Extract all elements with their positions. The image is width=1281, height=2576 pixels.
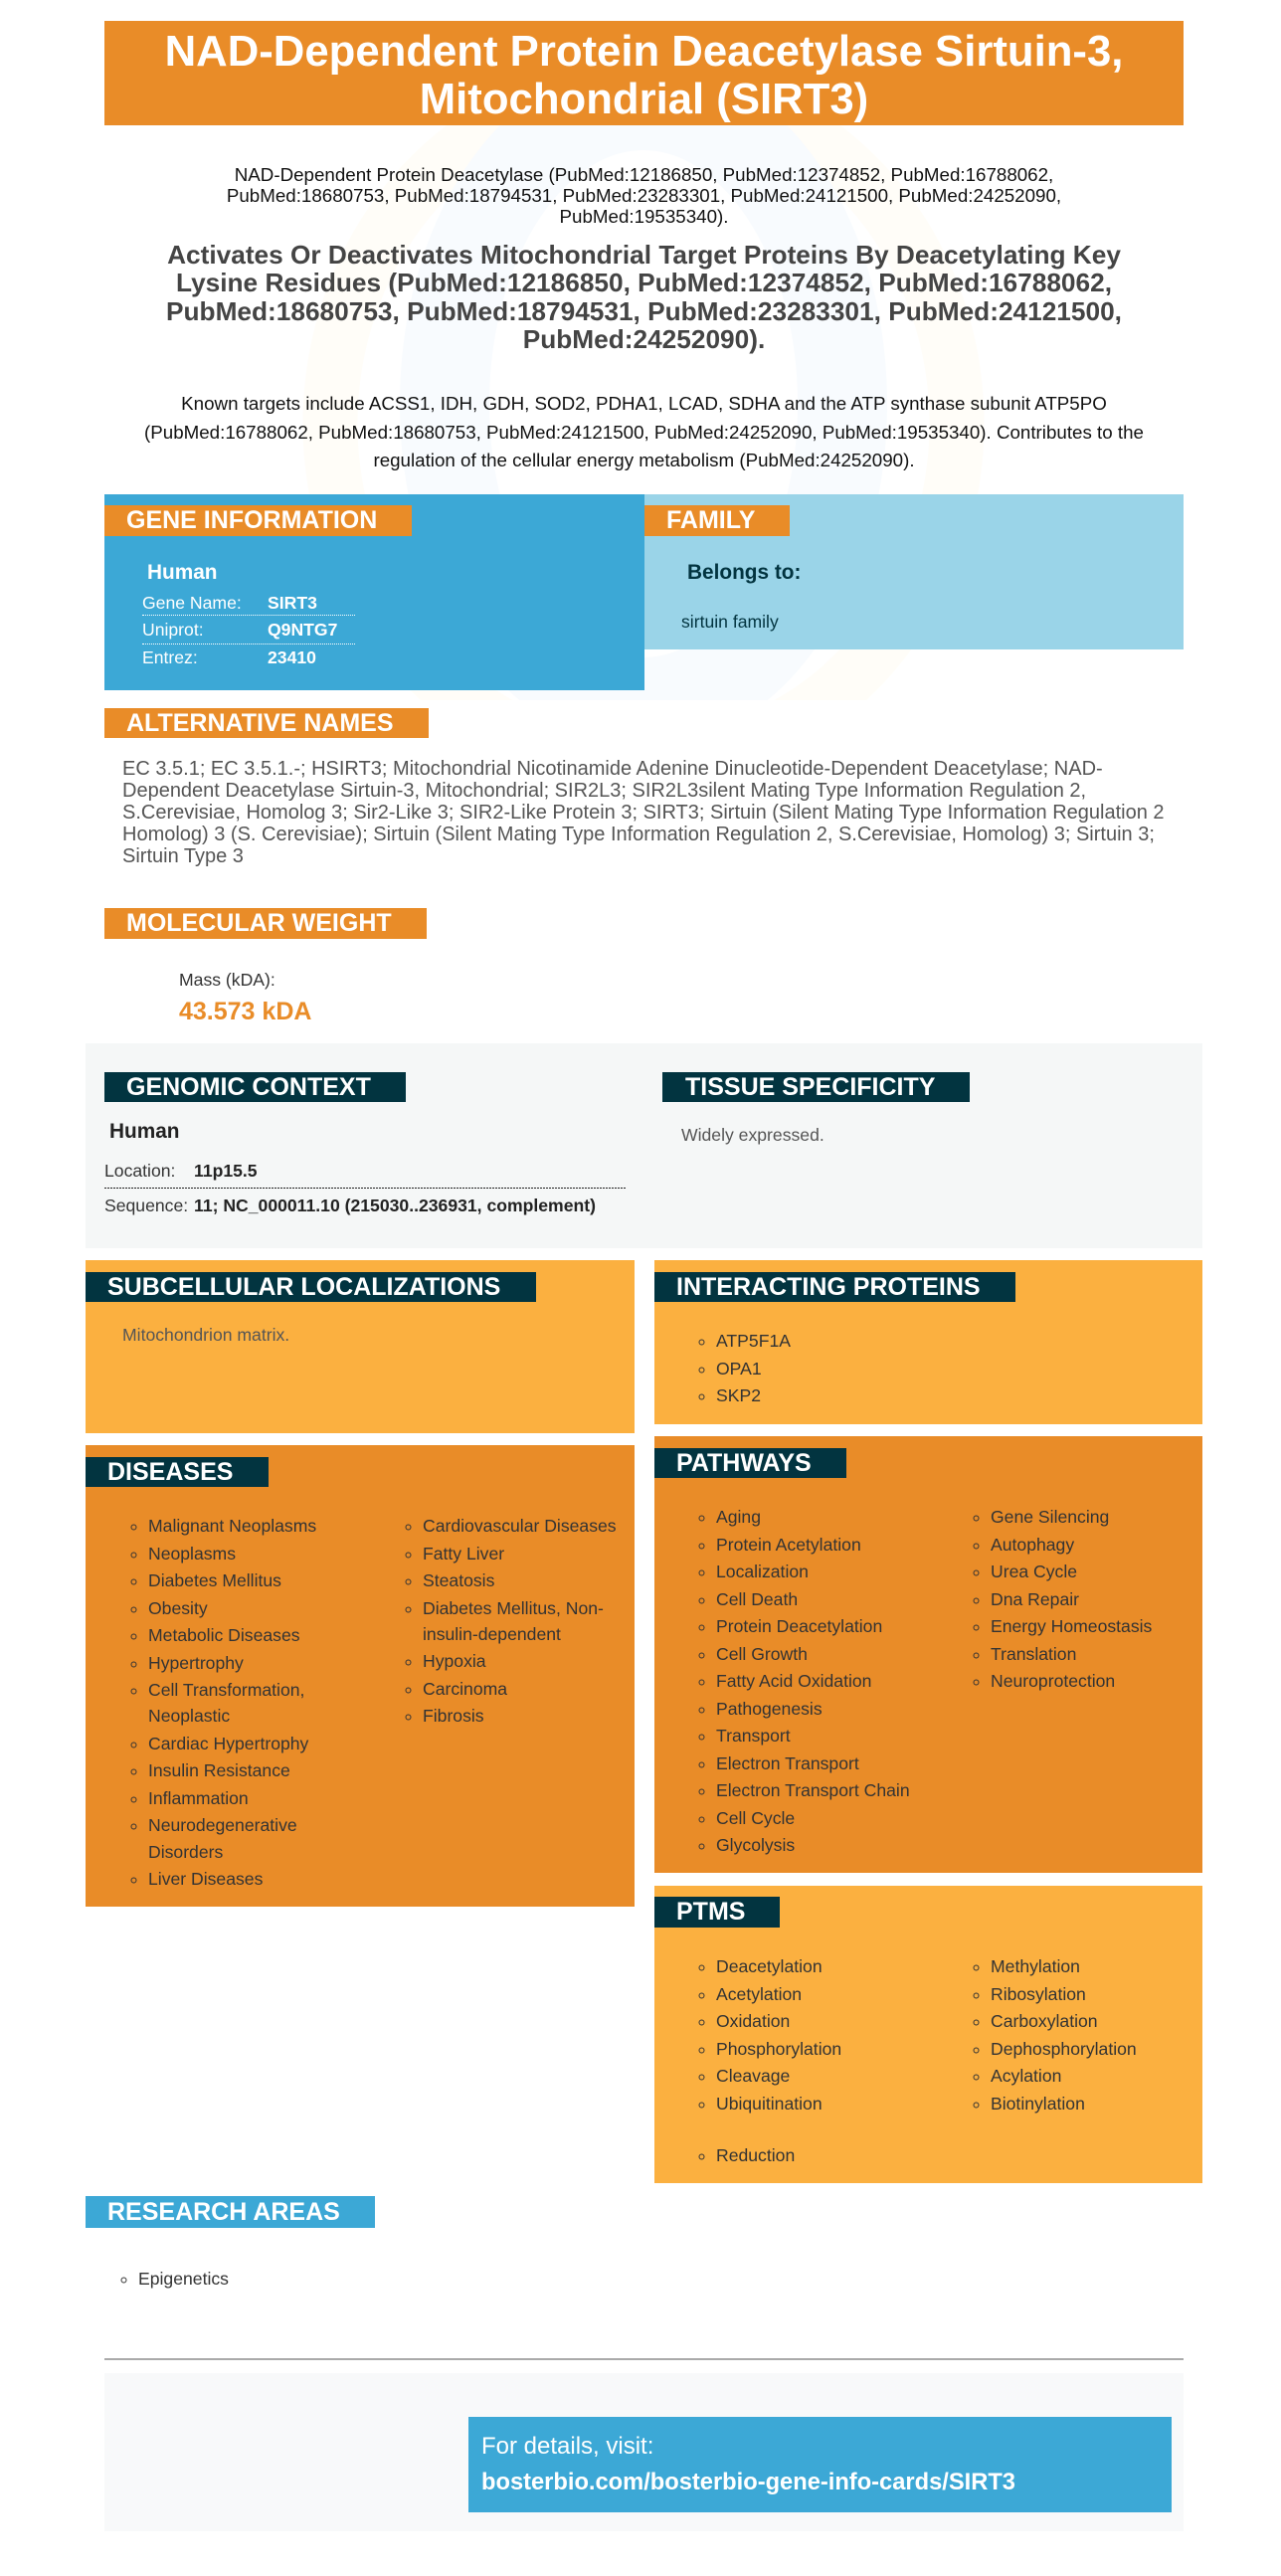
title <box>104 21 1184 125</box>
heading <box>654 1448 846 1478</box>
heading <box>654 1897 780 1928</box>
entrez row: 23410 <box>268 647 316 667</box>
protein list: OPA1 <box>716 1359 762 1379</box>
disease list column 2: Cardiovascular Diseases <box>423 1516 617 1536</box>
alternative names text <box>122 758 1165 867</box>
species label: Human <box>109 1120 179 1143</box>
ptm list column 1 <box>698 1956 841 2165</box>
panel: subcellular localizations <box>86 1260 635 1433</box>
pathway list column 1: Pathogenesis <box>716 1699 823 1719</box>
uniprot row: Uniprot: <box>142 620 204 640</box>
pathway list column 1 <box>698 1507 910 1855</box>
panel: family <box>644 494 1184 649</box>
sequence row <box>104 1196 596 1215</box>
call to action <box>468 2417 1172 2512</box>
pathway list column 2: Gene Silencing <box>991 1507 1109 1527</box>
function heading: PubMed:24252090). <box>523 324 765 354</box>
heading: alternative names: ALTERNATIVE NAMES <box>126 709 394 737</box>
pathway list column 2: Energy Homeostasis <box>991 1616 1152 1636</box>
disease list column 2: Carcinoma <box>423 1679 507 1699</box>
panel: genomic context and tissue specificity: 11; NC_000011.10 (215030..236931, complement) <box>194 1196 596 1215</box>
ptm list column 1: Deacetylation <box>716 1956 823 1976</box>
pathway list column 1: Aging <box>716 1507 761 1527</box>
entrez row <box>142 647 316 667</box>
location row: Location: <box>104 1161 175 1181</box>
mass value: 43.573 kDA <box>179 998 311 1025</box>
heading: PTMS <box>676 1898 745 1926</box>
intro paragraph: NAD-Dependent Protein Deacetylase (PubMed:12186850, PubMed:12374852, PubMed:16788062, <box>235 164 1053 185</box>
ptm list column 1: Phosphorylation <box>716 2039 841 2059</box>
alternative names text: Sirtuin Type 3 <box>122 845 244 867</box>
targets paragraph <box>144 393 1144 470</box>
pathway list column 1: Transport <box>716 1726 791 1746</box>
panel: gene information <box>104 494 644 690</box>
disease list column 2: Fatty Liver <box>423 1544 504 1564</box>
ptm list column 1: Oxidation <box>716 2011 790 2031</box>
species label: Human <box>147 561 217 584</box>
heading: molecular weight: MOLECULAR WEIGHT <box>126 909 392 937</box>
function heading <box>166 240 1122 354</box>
disease list column 2: Diabetes Mellitus, Non- <box>423 1597 604 1617</box>
disease list column 2: Steatosis <box>423 1570 494 1590</box>
title: NAD-Dependent Protein Deacetylase Sirtuin-3, <box>165 27 1123 76</box>
protein list: ATP5F1A <box>716 1331 791 1351</box>
disease list column 1: Insulin Resistance <box>148 1760 290 1780</box>
pathway list column 1: Fatty Acid Oxidation <box>716 1671 871 1691</box>
disease list column 2: insulin-dependent <box>423 1624 561 1644</box>
alternative names text: Dependent Deacetylase Sirtuin-3, Mitochondrial; SIR2L3; SIR2L3silent Mating Type Information Regulation 2, <box>122 780 1086 802</box>
ptm list column 1: Acetylation <box>716 1983 802 2003</box>
pathway list column 1: Cell Growth <box>716 1643 808 1663</box>
heading: family <box>644 505 790 536</box>
ptm list column 1: Reduction <box>716 2145 795 2165</box>
gene name row <box>142 590 355 616</box>
entrez row: Entrez: <box>142 647 198 667</box>
location row: 11p15.5 <box>194 1161 258 1181</box>
belongs to label: Belongs to: <box>687 561 801 584</box>
heading: PATHWAYS <box>676 1449 812 1477</box>
ptm list column 2: Acylation <box>991 2066 1061 2086</box>
disease list column 1 <box>131 1516 316 1889</box>
pathway list column 2: Translation <box>991 1643 1076 1663</box>
protein list <box>698 1331 791 1405</box>
pathway list column 1: Electron Transport Chain <box>716 1780 910 1800</box>
tissue specificity text: Widely expressed. <box>681 1125 824 1145</box>
background watermark logo <box>298 125 995 700</box>
heading: tissue specificity: TISSUE SPECIFICITY <box>685 1073 935 1101</box>
footer rule <box>104 2358 1184 2360</box>
targets paragraph: Known targets include ACSS1, IDH, GDH, SOD2, PDHA1, LCAD, SDHA and the ATP synthase subunit ATP5PO <box>181 393 1107 414</box>
pathway list column 1: Cell Cycle <box>716 1808 795 1828</box>
disease list column 2: Hypoxia <box>423 1651 486 1671</box>
ptm list column 2: Dephosphorylation <box>991 2039 1137 2059</box>
pathway list column 2: Urea Cycle <box>991 1562 1077 1581</box>
gene name row: SIRT3 <box>268 593 317 613</box>
disease list column 1: Cell Transformation, <box>148 1680 304 1700</box>
title: Mitochondrial (SIRT3) <box>420 75 868 123</box>
intro paragraph: PubMed:19535340). <box>560 206 728 227</box>
localization text: Mitochondrion matrix. <box>122 1325 289 1345</box>
panel: interacting proteins <box>654 1260 1202 1424</box>
panel: ptms <box>654 1886 1202 2183</box>
disease list column 1: Metabolic Diseases <box>148 1625 300 1645</box>
ptm list column 1: Cleavage <box>716 2066 790 2086</box>
heading: gene information: GENE INFORMATION <box>126 506 377 534</box>
uniprot row <box>142 617 355 644</box>
heading: SUBCELLULAR LOCALIZATIONS <box>107 1273 500 1301</box>
panel: pathways <box>654 1436 1202 1873</box>
disease list column 1: Inflammation <box>148 1788 249 1808</box>
alternative names text: S.Cerevisiae, Homolog 3; Sir2-Like 3; SIR2-Like Protein 3; SIRT3; Sirtuin (Silent Mating Type Information Regulation 2 <box>122 802 1165 824</box>
panel: diseases <box>86 1445 635 1907</box>
heading: research areas: RESEARCH AREAS <box>107 2198 340 2226</box>
heading: DISEASES <box>107 1458 233 1486</box>
alternative names text: Homolog) 3 (S. Cerevisiae); Sirtuin (Silent Mating Type Information Regulation 2, S.Cerevisiae, Homolog) 3; Sirtuin 3; <box>122 824 1155 845</box>
mass label: Mass (kDA): <box>179 970 275 990</box>
sequence row: Sequence: <box>104 1196 188 1215</box>
ptm list column 1: Ubiquitination <box>716 2093 823 2113</box>
research areas list: Epigenetics <box>138 2269 229 2289</box>
intro paragraph: PubMed:18680753, PubMed:18794531, PubMed:23283301, PubMed:24121500, PubMed:24252090, <box>227 185 1061 206</box>
ptm list column 2: Biotinylation <box>991 2093 1085 2113</box>
disease list column 1: Malignant Neoplasms <box>148 1516 316 1536</box>
panel: footer <box>104 2373 1184 2531</box>
function heading: PubMed:18680753, PubMed:18794531, PubMed:23283301, PubMed:24121500, <box>166 296 1122 326</box>
pathway list column 2 <box>973 1507 1152 1691</box>
disease list column 1: Disorders <box>148 1842 223 1862</box>
ptm list column 2: Carboxylation <box>991 2011 1098 2031</box>
pathway list column 1: Electron Transport <box>716 1752 859 1772</box>
ptm list column 2 <box>973 1956 1137 2113</box>
heading: INTERACTING PROTEINS <box>676 1273 981 1301</box>
pathway list column 2: Neuroprotection <box>991 1671 1115 1691</box>
gene name row: Gene Name: <box>142 593 242 613</box>
disease list column 2: Fibrosis <box>423 1706 484 1726</box>
pathway list column 1: Protein Deacetylation <box>716 1616 882 1636</box>
heading <box>86 1457 269 1487</box>
targets paragraph: regulation of the cellular energy metabolism (PubMed:24252090). <box>373 450 915 470</box>
pathway list column 1: Protein Acetylation <box>716 1534 861 1554</box>
pathway list column 1: Cell Death <box>716 1589 798 1609</box>
disease list column 1: Obesity <box>148 1597 208 1617</box>
disease list column 1: Cardiac Hypertrophy <box>148 1734 308 1753</box>
targets paragraph: (PubMed:16788062, PubMed:18680753, PubMed:24121500, PubMed:24252090, PubMed:19535340). Contributes to the <box>144 422 1144 443</box>
disease list column 1: Neurodegenerative <box>148 1815 297 1835</box>
heading: genomic context: GENOMIC CONTEXT <box>126 1073 371 1101</box>
pathway list column 1: Localization <box>716 1562 809 1581</box>
disease list column 2 <box>406 1516 617 1726</box>
ptm list column 2: Methylation <box>991 1956 1080 1976</box>
pathway list column 2: Autophagy <box>991 1534 1074 1554</box>
disease list column 1: Neoplasms <box>148 1544 236 1564</box>
alternative names text: EC 3.5.1; EC 3.5.1.-; HSIRT3; Mitochondrial Nicotinamide Adenine Dinucleotide-Dependent Deacetylase; NAD- <box>122 758 1103 780</box>
uniprot row: Q9NTG7 <box>268 620 337 640</box>
protein list: SKP2 <box>716 1385 761 1405</box>
pathway list column 1: Glycolysis <box>716 1835 795 1855</box>
ptm list column 2: Ribosylation <box>991 1983 1086 2003</box>
cta label: For details, visit: <box>481 2433 653 2460</box>
pathway list column 2: Dna Repair <box>991 1589 1079 1609</box>
disease list column 1: Liver Diseases <box>148 1869 263 1889</box>
cta link: bosterbio.com/bosterbio-gene-info-cards/SIRT3 <box>481 2470 1015 2495</box>
function heading: Activates Or Deactivates Mitochondrial Target Proteins By Deacetylating Key <box>167 240 1121 270</box>
disease list column 1: Neoplastic <box>148 1706 230 1726</box>
panel: genomic context and tissue specificity <box>86 1043 1202 1248</box>
heading: family: FAMILY <box>666 506 755 534</box>
intro paragraph <box>227 164 1061 227</box>
family value: sirtuin family <box>681 612 779 632</box>
location row <box>104 1158 626 1189</box>
function heading: Lysine Residues (PubMed:12186850, PubMed:12374852, PubMed:16788062, <box>176 268 1112 297</box>
disease list column 1: Hypertrophy <box>148 1653 244 1673</box>
disease list column 1: Diabetes Mellitus <box>148 1570 281 1590</box>
